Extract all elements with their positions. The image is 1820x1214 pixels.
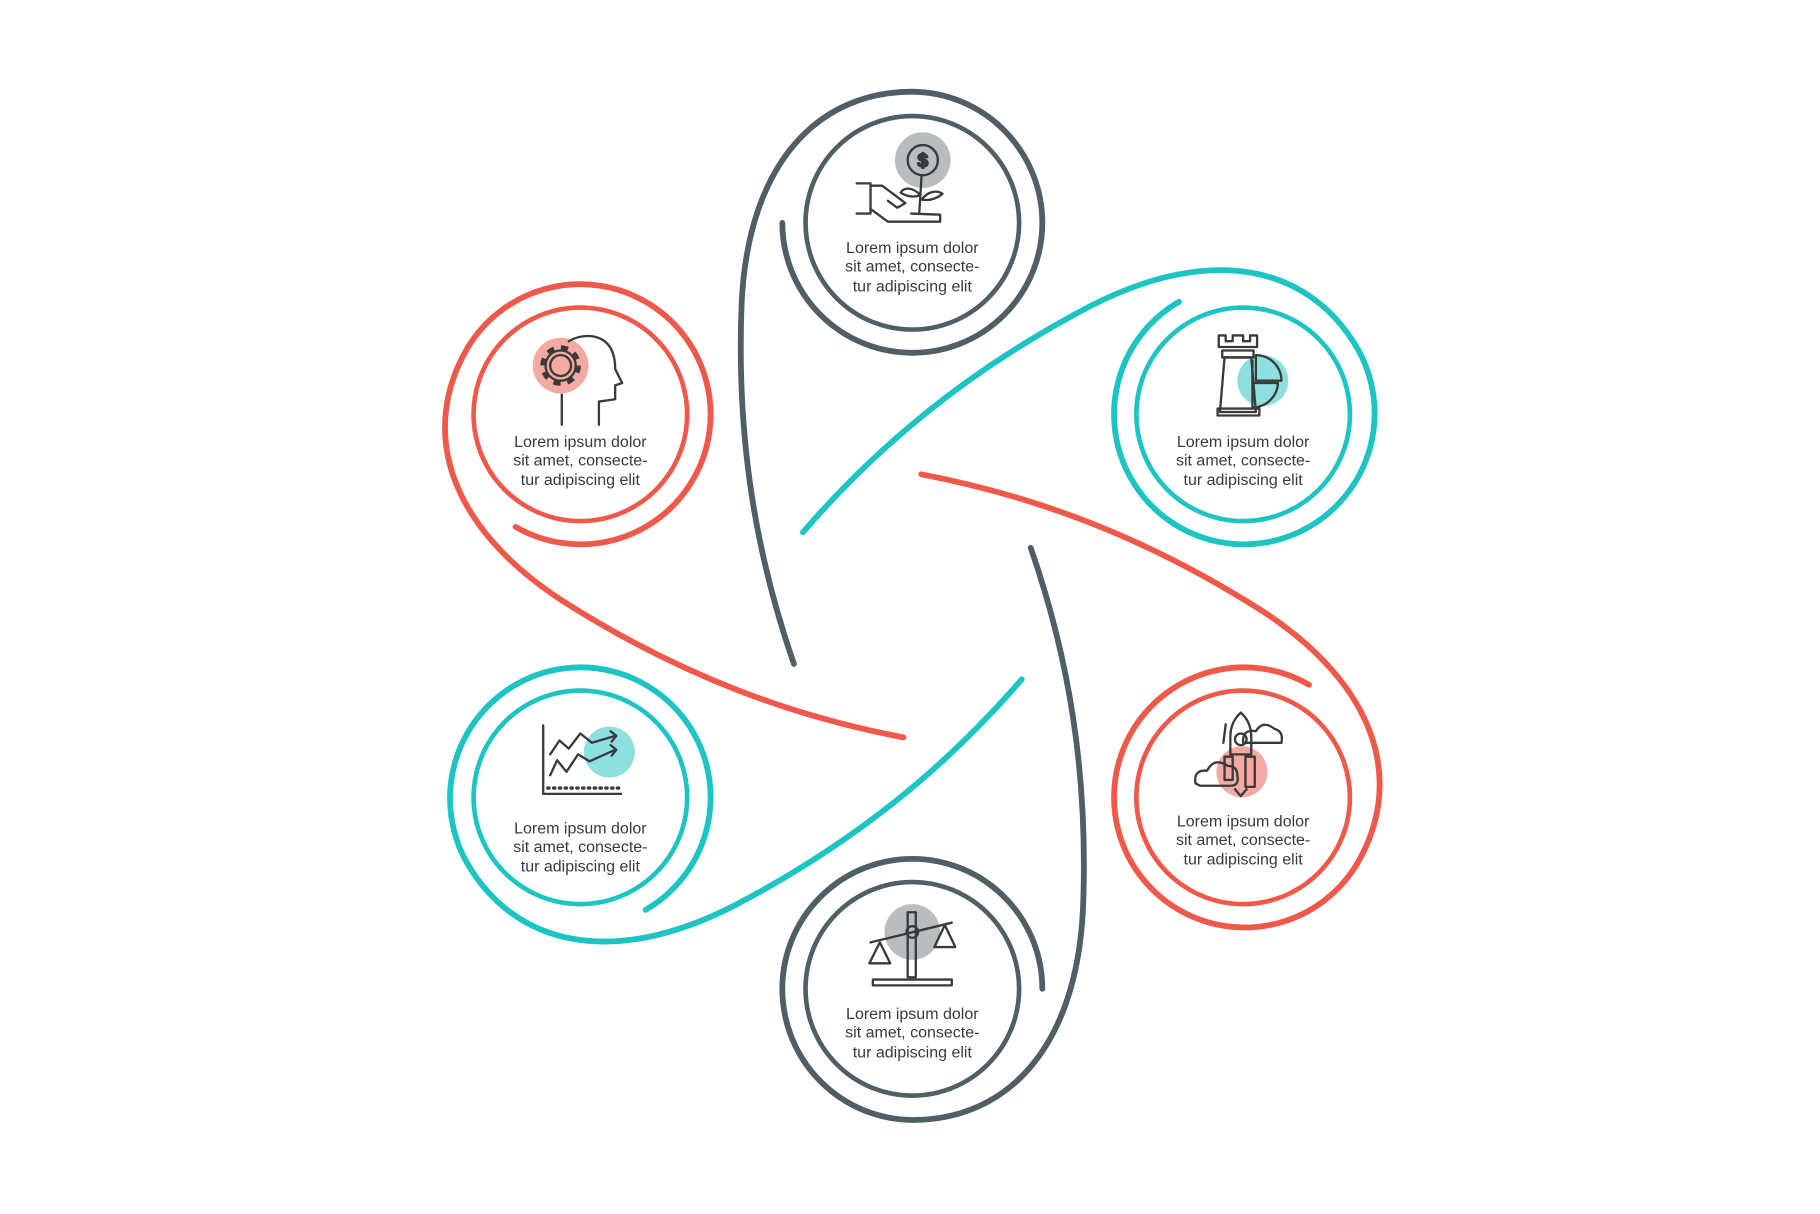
panel: top: tur adipiscing elit [853,278,972,295]
panel: lower-left [474,691,687,904]
panel: top: sit amet, consecte- [845,259,979,276]
text: Lorem ipsum dolor [514,820,647,837]
icon: rocket with clouds [1195,713,1282,797]
panel: upper-right: tur adipiscing elit [1184,472,1303,489]
icon: hand with money plant [857,132,951,222]
panel: bottom [806,882,1019,1096]
panel: upper-left [474,308,687,521]
spiral: lower-right red [797,428,1443,975]
panel: upper-left: sit amet, consecte- [513,452,648,469]
text: Lorem ipsum dolor [1177,813,1310,830]
icon: head with gear [533,336,622,425]
panel: bottom: sit amet, consecte- [845,1025,979,1042]
text: Lorem ipsum dolor [846,1006,979,1023]
panel: lower-right [1136,691,1350,904]
icon: line chart with arrows [543,725,635,794]
icon: hand with money plant: $ [918,150,929,171]
panel: lower-right: tur adipiscing elit [1184,852,1303,869]
text: Lorem ipsum dolor [846,240,979,257]
panel: upper-left: tur adipiscing elit [521,472,641,489]
spiral: upper-left red [381,236,1028,783]
panel: lower-left: sit amet, consecte- [513,839,648,856]
panel: bottom: tur adipiscing elit [853,1044,972,1061]
panel: upper-right: sit amet, consecte- [1176,452,1310,469]
panel: lower-right: sit amet, consecte- [1176,832,1310,849]
icon: rook and pie chart [1218,335,1288,415]
panel: lower-left: tur adipiscing elit [521,859,641,876]
text: Lorem ipsum dolor [514,434,647,451]
text: Lorem ipsum dolor [1177,434,1310,451]
panel: upper-right [1136,308,1350,521]
spiral: lower-left teal [402,464,1048,1011]
spiral: bottom gray [782,548,1084,1120]
icon: balance scale [869,904,955,985]
spiral: upper-right teal [776,200,1423,747]
spiral: top gray [741,92,1042,664]
panel: top [806,116,1019,330]
